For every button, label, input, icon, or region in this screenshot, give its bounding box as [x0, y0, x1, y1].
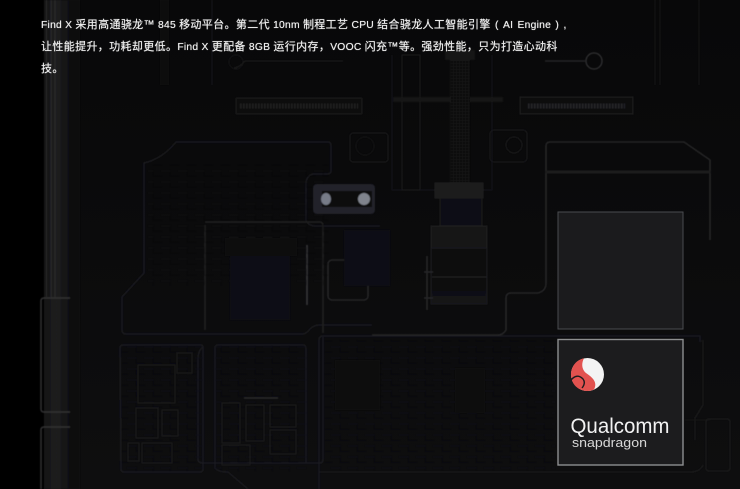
snapdragon wordmark: snapdragon	[572, 435, 647, 450]
camera bracket with screws	[313, 184, 375, 214]
description text: 让性能提升，功耗却更低。Find X 更配备 8GB 运行内存，VOOC 闪充™等。强劲性能，只为打造心动科	[41, 41, 558, 53]
description text: 技。	[41, 63, 64, 75]
left phone frame	[41, 0, 212, 489]
Qualcomm Snapdragon logo tile	[558, 340, 683, 465]
camera mechanism	[392, 50, 503, 310]
description text: Find X 采用高通骁龙™ 845 移动平台。第二代 10nm 制程工艺 CPU 结合骁龙人工智能引擎 ( AI Engine ) ,	[41, 19, 567, 31]
circuit detail blocks	[122, 165, 555, 471]
Qualcomm wordmark: Qualcomm	[570, 415, 670, 438]
description text	[41, 18, 567, 75]
connectors	[236, 97, 633, 162]
processor chip	[558, 212, 683, 329]
icon: Snapdragon emblem	[571, 358, 604, 391]
